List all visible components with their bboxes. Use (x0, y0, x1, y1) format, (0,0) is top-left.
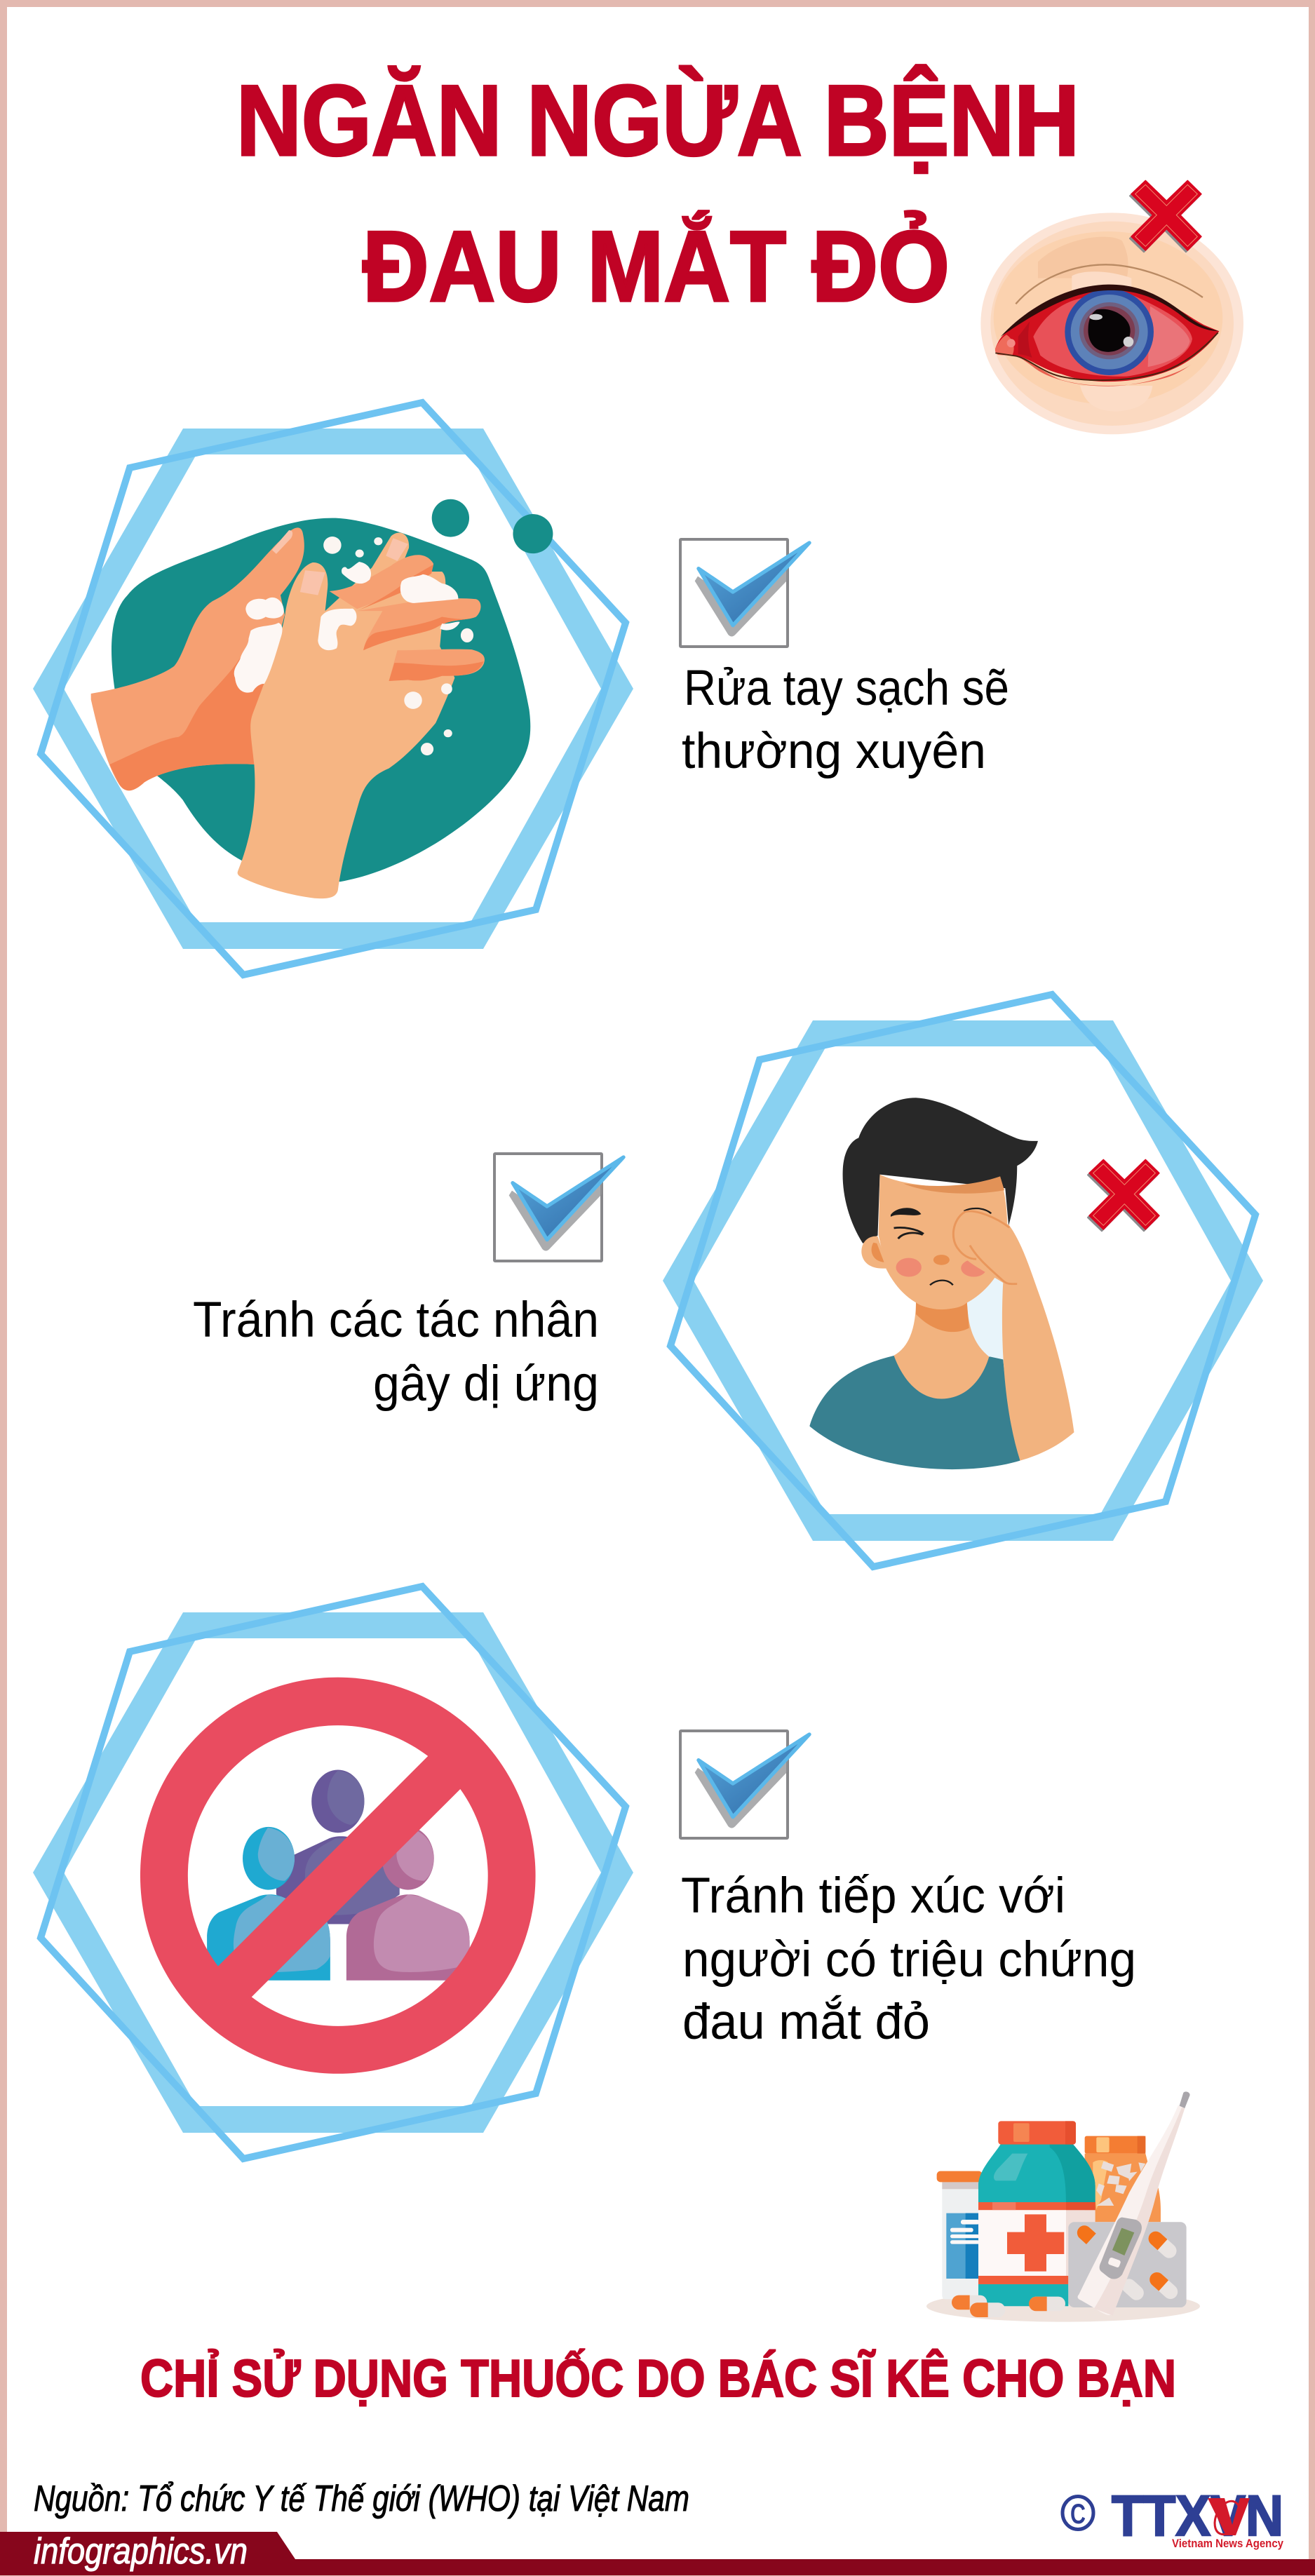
icon: red cross on eye (1130, 181, 1201, 252)
hexagon frame (33, 1586, 633, 2159)
icon: red cross (1088, 1160, 1159, 1231)
title: ĐAU MẮT ĐỎ (363, 210, 950, 323)
checkbox (494, 1154, 623, 1261)
checkbox (680, 1731, 809, 1838)
text: avoid contact: Tránh tiếp xúc với (681, 1868, 1065, 1924)
panel: avoid allergens (193, 994, 1263, 1567)
logo: TTXVN: Vietnam News Agency (1172, 2537, 1283, 2550)
text: avoid contact: người có triệu chứng (682, 1932, 1136, 1988)
logo: TTXVN: TTXVN (1112, 2484, 1283, 2548)
hexagon frame (33, 403, 633, 975)
text: avoid contact (681, 1868, 1136, 2050)
illustration: prohibited contact with people (140, 1678, 536, 2074)
text: wash hands: thường xuyên (682, 724, 986, 779)
panel: hand washing (33, 403, 1009, 975)
text: avoid contact: đau mắt đỏ (682, 1995, 930, 2050)
illustration: man rubbing eye (810, 1098, 1074, 1469)
text: avoid allergens (193, 1293, 599, 1412)
title: NGĂN NGỪA BỆNH (236, 65, 1079, 177)
heading: only use prescribed medicine: CHỈ SỬ DỤNG THUỐC DO BÁC SĨ KÊ CHO BẠN (140, 2349, 1176, 2408)
panel: avoid contact (33, 1586, 1136, 2159)
text: wash hands: Rửa tay sạch sẽ (684, 661, 1009, 716)
checkbox (680, 539, 809, 647)
illustration: medicines (926, 2091, 1200, 2322)
source text: Nguồn: Tổ chức Y tế Thế giới (WHO) tại Việt Nam (34, 2479, 689, 2519)
footer bar (0, 2531, 1315, 2575)
website text: infographics.vn (34, 2531, 248, 2572)
text: avoid allergens: gây dị ứng (373, 1356, 599, 1412)
copyright mark (1063, 2497, 1093, 2530)
text: wash hands (682, 661, 1009, 779)
illustration: washing hands (91, 499, 553, 898)
icon: red eye (980, 181, 1243, 434)
title (236, 65, 1079, 323)
text: avoid allergens: Tránh các tác nhân (193, 1293, 599, 1348)
copyright mark: C (1070, 2499, 1086, 2530)
hexagon frame (663, 994, 1263, 1567)
